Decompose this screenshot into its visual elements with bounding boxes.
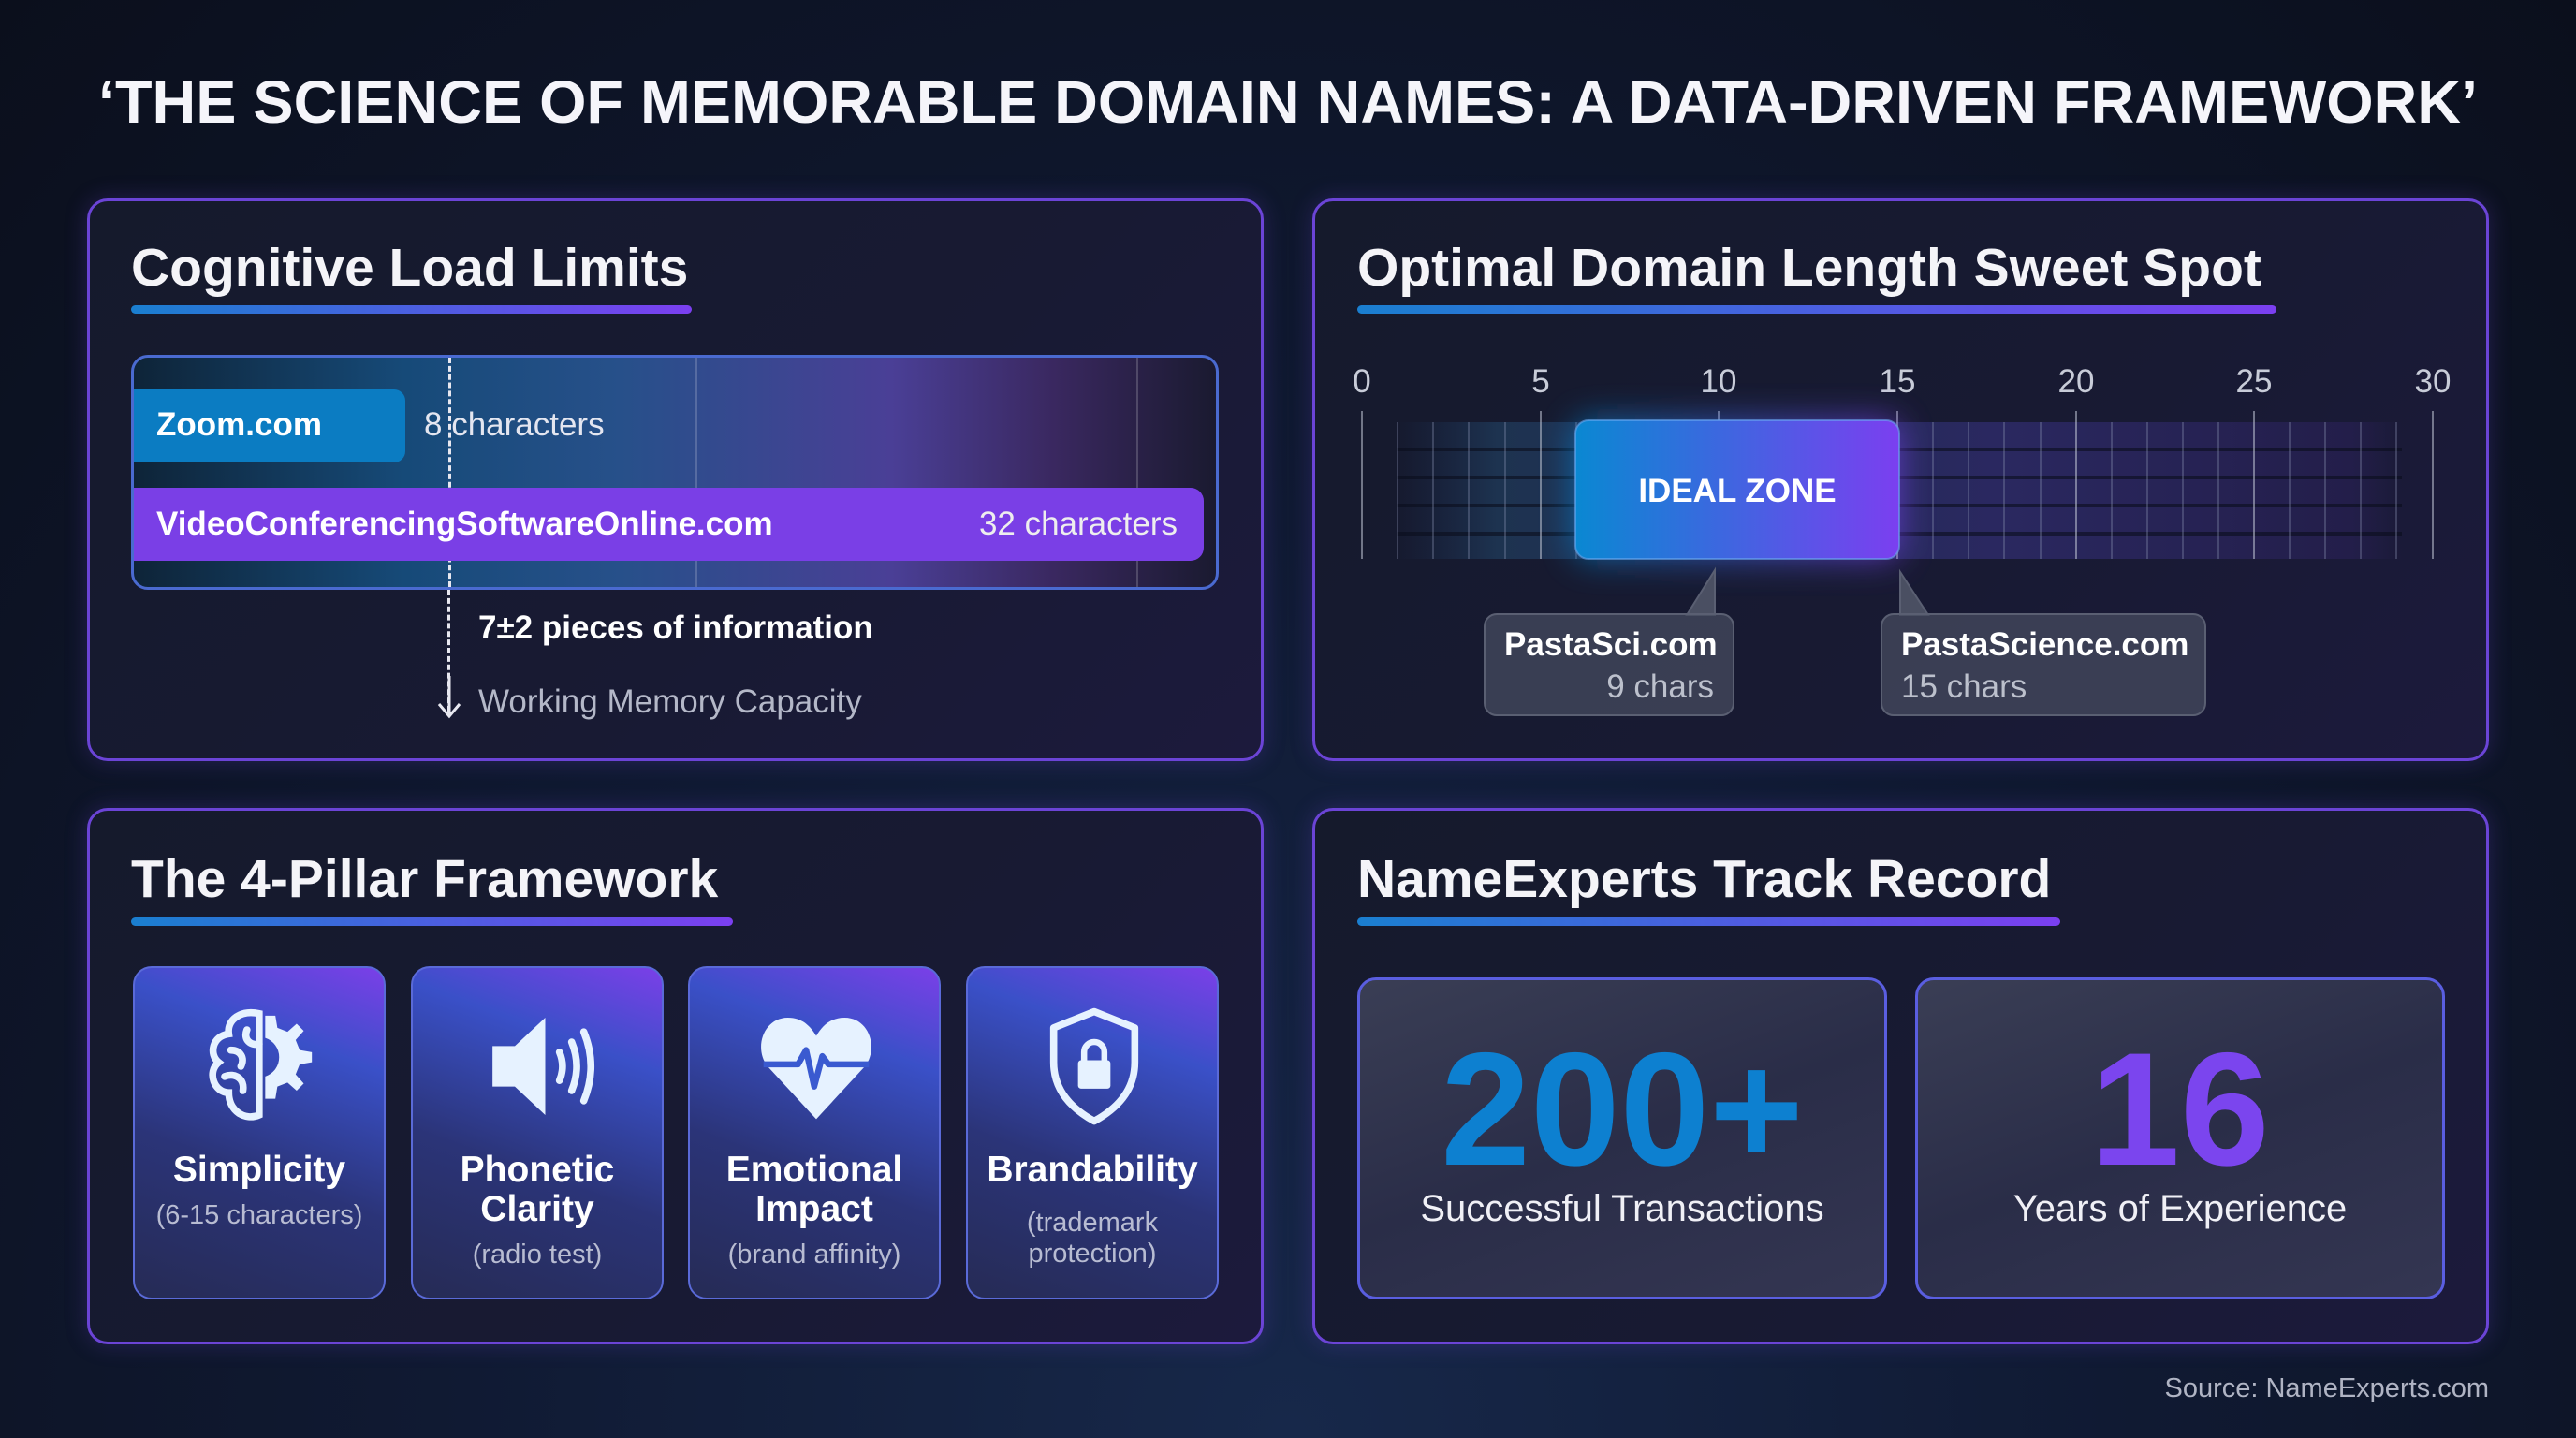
source note: Source: NameExperts.com — [2164, 1373, 2489, 1403]
stat: transactions — [1357, 977, 1887, 1299]
stat: transactions: 200+ — [1441, 1020, 1804, 1199]
chart: domain length comparison — [131, 355, 1219, 590]
label: 32 characters: 32 characters — [979, 506, 1178, 542]
text: working memory capacity: Working Memory Capacity — [478, 683, 862, 720]
card: emotional impact: Impact — [755, 1189, 873, 1229]
panel: track record — [1312, 808, 2489, 1344]
card: simplicity — [133, 966, 386, 1299]
card: brandability — [966, 966, 1219, 1299]
heading: optimal domain length: Optimal Domain Length Sweet Spot — [1357, 238, 2261, 298]
stat: years: Years of Experience — [2013, 1188, 2347, 1229]
callout: PastaScience.com: 15 chars — [1901, 668, 2027, 705]
stat: years — [1915, 977, 2445, 1299]
icon: speaker — [492, 1018, 595, 1115]
card: phonetic clarity: Clarity — [480, 1189, 594, 1229]
callout: PastaSci.com: PastaSci.com — [1504, 626, 1718, 663]
card: simplicity: Simplicity — [173, 1150, 345, 1190]
pointers — [1687, 570, 1715, 615]
stat: years: 16 — [2090, 1020, 2270, 1199]
ideal zone — [1575, 420, 1899, 559]
card: phonetic clarity: (radio test) — [473, 1240, 602, 1269]
chart: length scale: 10 — [1701, 363, 1736, 400]
chart: length scale — [1353, 363, 2451, 616]
icon: brain gear — [209, 1009, 313, 1121]
card: emotional impact: Emotional — [726, 1150, 902, 1190]
chart: length scale: 20 — [2058, 363, 2094, 400]
callout: PastaScience.com: PastaScience.com — [1901, 626, 2188, 663]
heading: track record: NameExperts Track Record — [1357, 849, 2051, 909]
card: simplicity: (6-15 characters) — [156, 1200, 362, 1230]
bar: long domain — [131, 488, 1204, 561]
chart: length scale: 0 — [1353, 363, 1371, 400]
card: phonetic clarity — [411, 966, 664, 1299]
card: emotional impact — [688, 966, 941, 1299]
label: 8 characters: 8 characters — [424, 406, 605, 443]
callout: PastaSci.com — [1484, 613, 1734, 716]
ideal zone: IDEAL ZONE — [1638, 473, 1837, 509]
panel: optimal domain length — [1312, 198, 2489, 761]
panel: cognitive load limits — [87, 198, 1264, 761]
title: ‘THE SCIENCE OF MEMORABLE DOMAIN NAMES: A DATA-DRIVEN FRAMEWORK’ — [98, 68, 2478, 136]
stat: transactions: Successful Transactions — [1420, 1188, 1824, 1229]
callout: PastaSci.com: 9 chars — [1606, 668, 1714, 705]
callout: PastaScience.com — [1881, 613, 2206, 716]
card: emotional impact: (brand affinity) — [728, 1240, 900, 1269]
chart: length scale: 30 — [2415, 363, 2451, 400]
bar: Zoom.com — [131, 389, 405, 462]
panel: 4-pillar framework — [87, 808, 1264, 1344]
arrow: down — [438, 676, 461, 719]
card: brandability: protection) — [1028, 1239, 1157, 1269]
chart: length scale: 25 — [2236, 363, 2272, 400]
label: long domain: VideoConferencingSoftwareOnline.com — [156, 506, 773, 542]
text: 7±2 pieces: 7±2 pieces of information — [478, 609, 873, 646]
card: phonetic clarity: Phonetic — [461, 1150, 614, 1190]
card: brandability: Brandability — [987, 1150, 1198, 1190]
dashed line: working memory — [447, 590, 450, 712]
chart: length scale: 15 — [1880, 363, 1915, 400]
label: Zoom.com: Zoom.com — [156, 406, 322, 443]
heading: cognitive load limits: Cognitive Load Limits — [131, 238, 688, 298]
card: brandability: (trademark — [1027, 1208, 1158, 1238]
icon: heart pulse — [761, 1018, 871, 1120]
chart: length scale: 5 — [1531, 363, 1550, 400]
icon: shield lock — [1050, 1007, 1138, 1125]
heading: 4-pillar framework: The 4-Pillar Framework — [131, 849, 718, 909]
